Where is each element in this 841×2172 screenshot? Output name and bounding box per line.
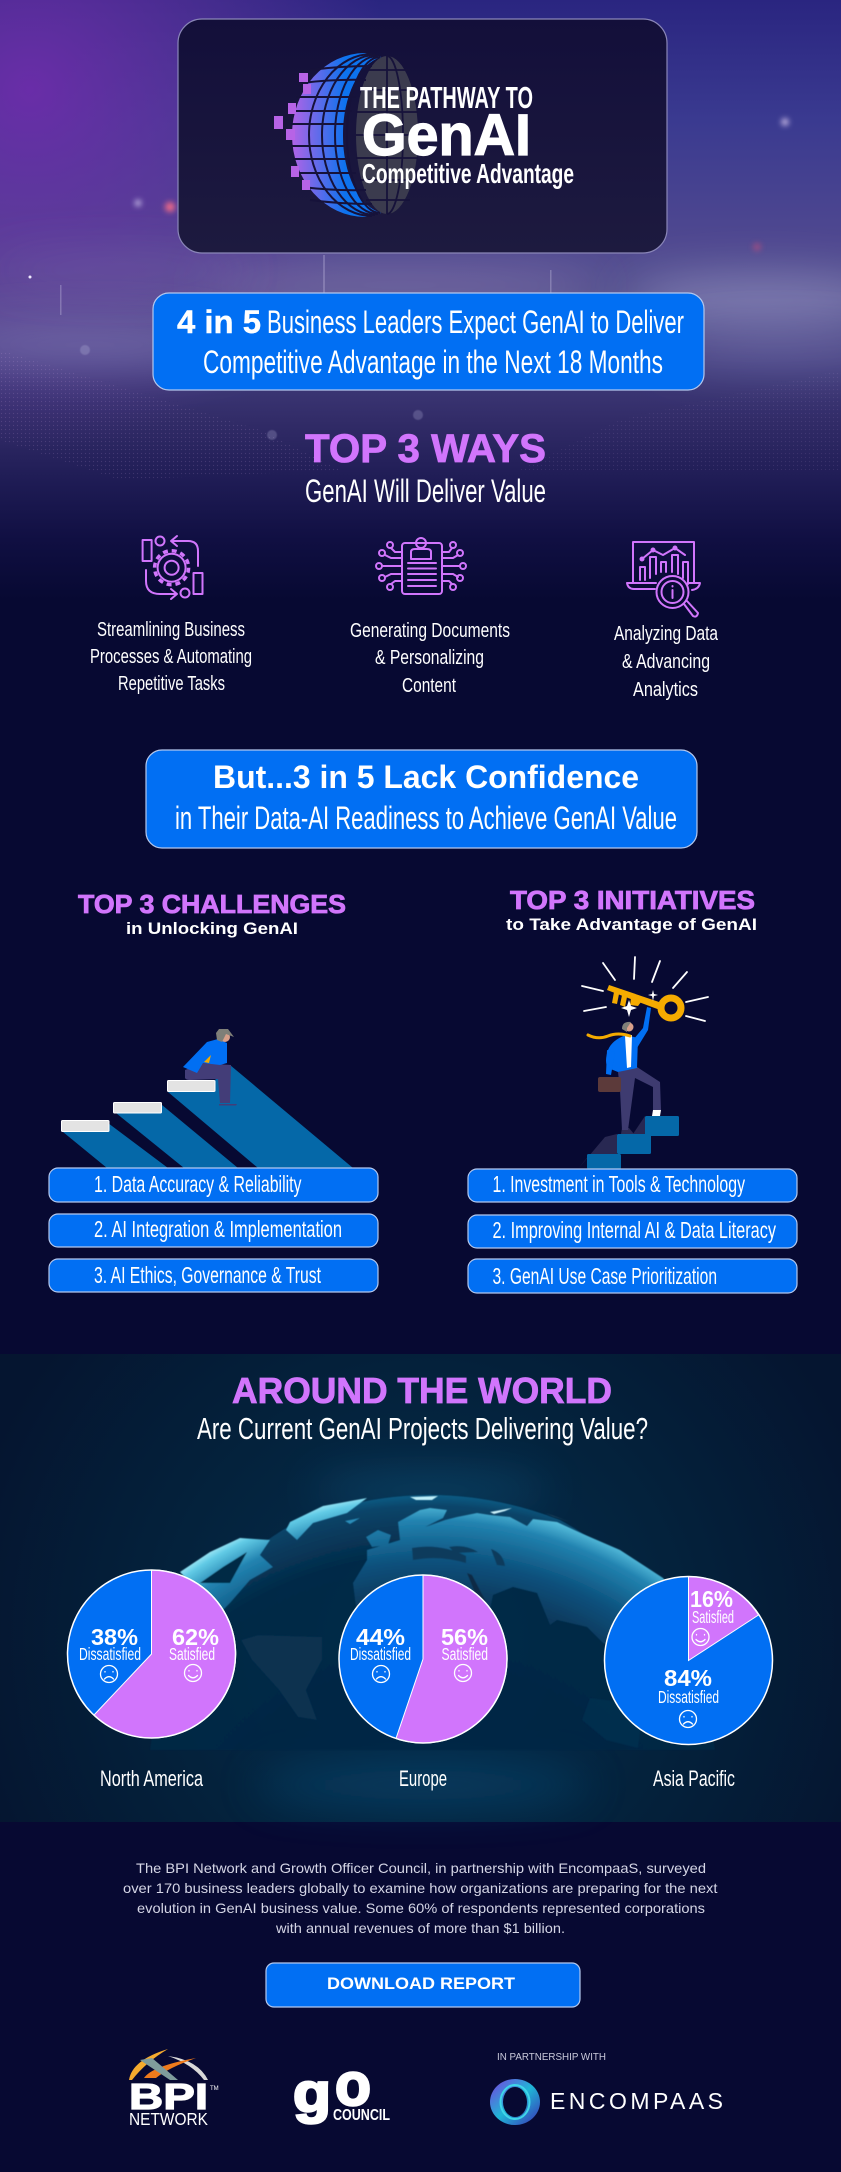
title line 3: Competitive Advantage xyxy=(362,158,574,189)
label: Content xyxy=(402,675,456,697)
satisfied value: 56% xyxy=(441,1624,488,1650)
icon: gear process xyxy=(143,536,202,599)
challenge bar 1: 1. Data Accuracy & Reliability xyxy=(94,1171,302,1197)
label: Repetitive Tasks xyxy=(118,673,225,695)
button: download report xyxy=(266,1963,580,2007)
logo: GO Council: g xyxy=(293,2061,331,2124)
challenge bar 2 xyxy=(49,1214,378,1247)
label: & Personalizing xyxy=(375,647,484,669)
illustration: glowing globe xyxy=(150,1476,715,1803)
satisfied label: Satisfied xyxy=(442,1644,488,1664)
dissatisfied label: Dissatisfied xyxy=(79,1644,141,1664)
heading: AROUND THE WORLD xyxy=(232,1370,612,1411)
dissatisfied label: Dissatisfied xyxy=(658,1687,719,1707)
logo: BPI Network: BPI xyxy=(129,2076,208,2117)
pie chart: Europe xyxy=(339,1575,507,1743)
title line 2: GenAI xyxy=(362,103,531,168)
icon: happy face xyxy=(184,1664,202,1682)
label: Analytics xyxy=(633,679,698,701)
callout: 3 in 5 xyxy=(146,750,697,848)
value item 1 xyxy=(90,536,252,695)
logo: BPI Network xyxy=(129,2049,219,2129)
icon: sad face xyxy=(680,1710,696,1728)
callout line 2: Competitive Advantage in the Next 18 Months xyxy=(203,344,663,380)
text block: survey description: The BPI Network and Growth Officer Council, in partnership with EncompaaS, surveyed xyxy=(136,1860,706,1876)
text block: survey description: evolution in GenAI business value. Some 60% of respondents represented corporations xyxy=(137,1900,705,1916)
region label: Asia Pacific xyxy=(653,1766,735,1791)
value item 3 xyxy=(614,542,719,701)
pie chart: Asia Pacific xyxy=(604,1576,772,1744)
label xyxy=(90,619,252,695)
initiative bar 3 xyxy=(468,1259,797,1293)
logo: GO Council: COUNCIL xyxy=(333,2107,390,2124)
panel: title logo xyxy=(178,19,667,253)
logo: Encompaas xyxy=(490,2079,723,2125)
challenge bar 1 xyxy=(49,1168,378,1202)
panel: challenges xyxy=(49,889,378,1292)
dissatisfied label: Dissatisfied xyxy=(350,1644,411,1664)
heading: top 3 ways: TOP 3 WAYS xyxy=(305,427,546,471)
region label: North America xyxy=(100,1766,204,1791)
satisfied label: Satisfied xyxy=(169,1644,215,1664)
partnership label: IN PARTNERSHIP WITH xyxy=(497,2051,606,2063)
label xyxy=(350,620,510,697)
label: Streamlining Business xyxy=(97,619,245,641)
label: Analyzing Data xyxy=(614,623,719,645)
panel: initiatives xyxy=(468,885,797,1293)
text block: survey description: over 170 business leaders globally to examine how organizations are preparing for the next xyxy=(123,1880,718,1896)
text block: survey description xyxy=(123,1860,718,1936)
icon: sad face xyxy=(100,1666,118,1682)
dissatisfied value: 84% xyxy=(664,1665,712,1691)
panel: around the world xyxy=(0,1354,841,1822)
logo: BPI Network: TM xyxy=(210,2086,219,2092)
label: Processes & Automating xyxy=(90,646,252,668)
logo: Encompaas: ENCOMPAAS xyxy=(550,2088,723,2114)
pie chart: North America xyxy=(68,1570,236,1738)
icon: analytics magnifier xyxy=(627,542,700,617)
initiative bar 3: 3. GenAI Use Case Prioritization xyxy=(492,1263,717,1289)
title line 1: THE PATHWAY TO xyxy=(360,80,533,115)
icon: sad face xyxy=(372,1666,390,1682)
logo: GO Council xyxy=(293,2051,390,2124)
subheading: Are Current GenAI Projects Delivering Value? xyxy=(197,1411,648,1446)
region label: Europe xyxy=(399,1766,447,1791)
hero background xyxy=(0,0,841,600)
callout line 1: But...3 in 5 Lack Confidence xyxy=(213,759,639,795)
dissatisfied value: 44% xyxy=(356,1624,405,1650)
satisfied value: 62% xyxy=(172,1624,219,1650)
challenge bar 3 xyxy=(49,1259,378,1292)
heading: top 3 ways xyxy=(305,427,546,509)
subheading: GenAI Will Deliver Value xyxy=(305,473,546,509)
initiative bar 2 xyxy=(468,1215,797,1248)
icon: happy face xyxy=(454,1664,472,1682)
dissatisfied value: 38% xyxy=(91,1624,138,1650)
challenge bar 2: 2. AI Integration & Implementation xyxy=(94,1216,342,1242)
icon: happy face xyxy=(692,1628,709,1646)
challenge bar 3: 3. AI Ethics, Governance & Trust xyxy=(94,1262,321,1288)
illustration: stairs and seated person xyxy=(62,1029,353,1168)
satisfied value: 16% xyxy=(690,1586,733,1612)
icon: tile globe xyxy=(274,53,418,217)
label xyxy=(614,623,719,701)
label: Generating Documents xyxy=(350,620,510,642)
icon: document circuit xyxy=(376,538,466,594)
button: download report: DOWNLOAD REPORT xyxy=(327,1974,516,1993)
initiative bar 1 xyxy=(468,1169,797,1202)
label: & Advancing xyxy=(622,651,710,673)
text block: survey description: with annual revenues of more than $1 billion. xyxy=(275,1920,565,1936)
illustration: person raising key xyxy=(578,957,708,1169)
heading: TOP 3 CHALLENGES xyxy=(78,889,346,919)
callout: 4 in 5 xyxy=(153,293,704,390)
value item 2 xyxy=(350,538,510,697)
logo: BPI Network: NETWORK xyxy=(129,2109,208,2129)
subheading: to Take Advantage of GenAI xyxy=(506,915,757,934)
satisfied label: Satisfied xyxy=(692,1607,734,1627)
subheading: in Unlocking GenAI xyxy=(126,919,298,938)
logo: GO Council: o xyxy=(335,2051,371,2118)
heading: TOP 3 INITIATIVES xyxy=(510,885,755,915)
callout emphasis: 4 in 5 xyxy=(177,304,261,340)
